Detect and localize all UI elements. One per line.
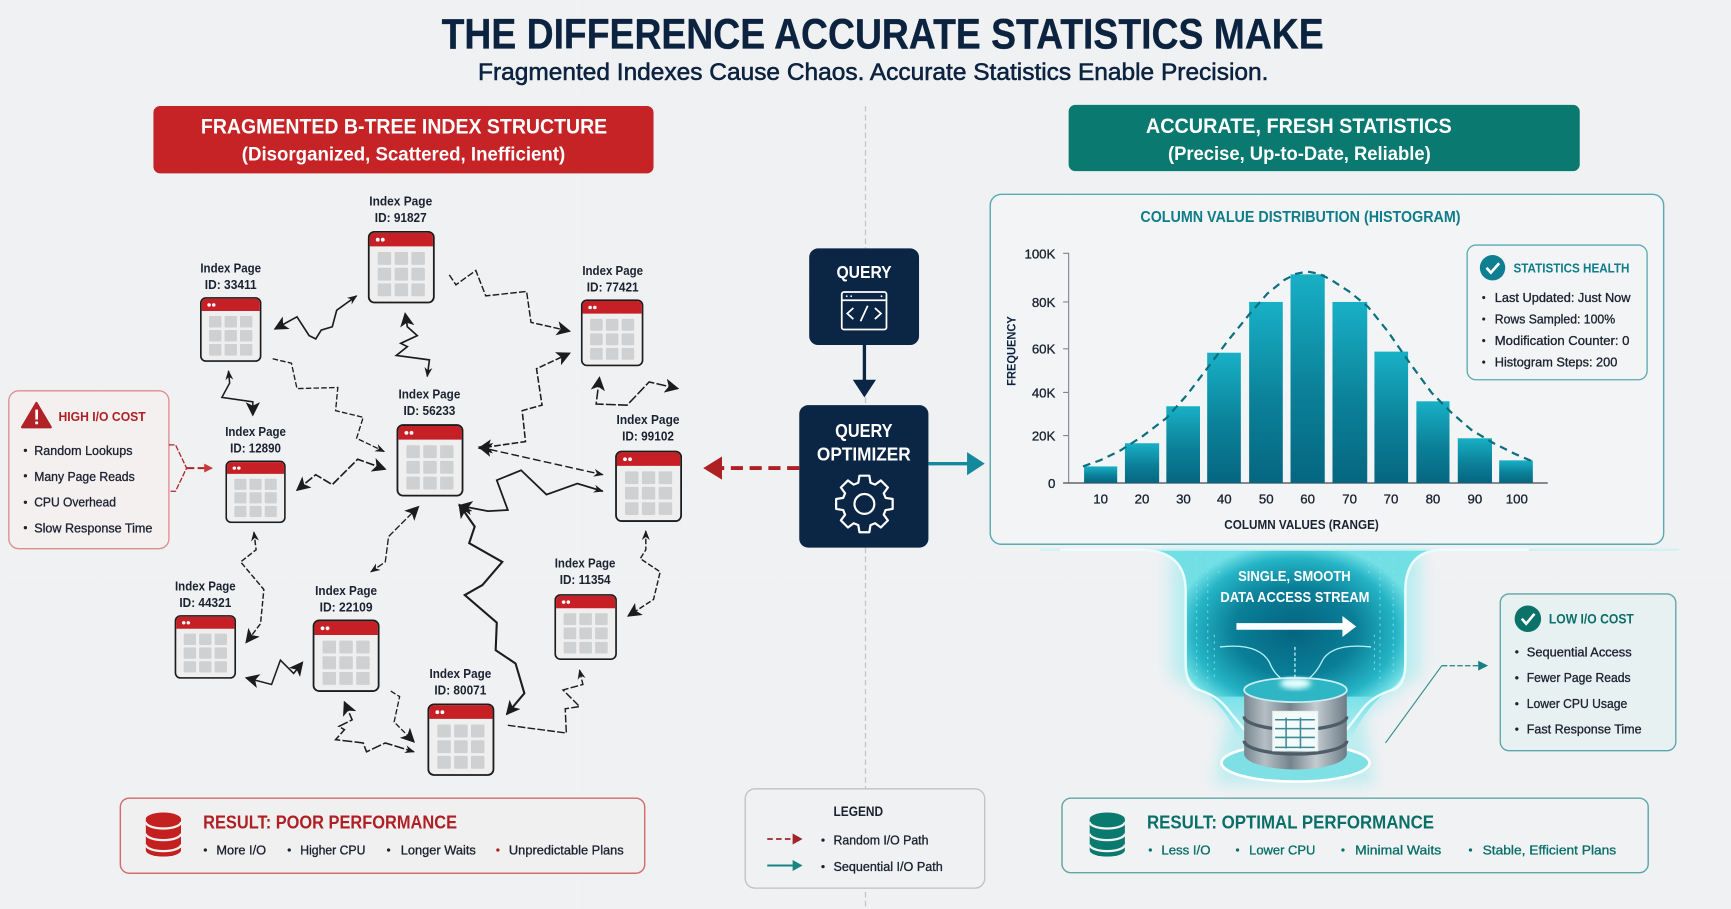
data access stream funnel: SINGLE, SMOOTH (1238, 569, 1351, 585)
x axis labels: 60 (1300, 491, 1315, 506)
callout: statistics health: Rows Sampled: 100% (1495, 311, 1615, 326)
legend (745, 789, 985, 888)
arrow: 12890 to 44321 (241, 532, 264, 643)
top glow line (1040, 549, 1679, 551)
result: optimal performance (1062, 798, 1648, 873)
result: poor performance (120, 798, 645, 873)
panel: histogram: COLUMN VALUE DISTRIBUTION (HISTOGRAM) (1140, 209, 1461, 226)
stream particles (1197, 557, 1393, 684)
y axis: 20K (1032, 428, 1056, 443)
x axis labels: 10 (1093, 491, 1108, 506)
index page 56233: Index Page (399, 387, 460, 402)
soft glow (1170, 552, 1421, 784)
y axis: 0 (1048, 476, 1055, 491)
subtitle: Fragmented Indexes Cause Chaos. Accurate Statistics Enable Precision. (478, 60, 1268, 86)
query box (809, 248, 919, 345)
index page 91827: ID: 91827 (375, 210, 427, 225)
y axis: 60K (1032, 341, 1056, 356)
index page 80071: Index Page (429, 666, 491, 681)
index page 77421: ID: 77421 (587, 279, 639, 294)
result: poor performance: Longer Waits (401, 842, 476, 857)
bar chart (1084, 274, 1533, 483)
callout: low I/O cost: Fewer Page Reads (1527, 670, 1631, 685)
index page 77421: Index Page (582, 263, 643, 278)
arrow: optimizer to fragmented index (703, 456, 799, 480)
arrow: 22109 to 80071 upper (391, 691, 414, 742)
index page 77421 (582, 263, 643, 365)
x axis labels: 50 (1259, 491, 1274, 506)
icon: code window (842, 292, 886, 330)
index page 99102 (616, 412, 681, 521)
y axis: 80K (1032, 295, 1056, 310)
data access stream funnel: DATA ACCESS STREAM (1220, 590, 1369, 606)
arrow: 56233 to 80071 (459, 505, 524, 714)
icon: warning triangle (22, 403, 51, 427)
index page 80071: ID: 80071 (434, 682, 486, 697)
callout: high I/O cost: CPU Overhead (34, 495, 116, 510)
callout: low I/O cost (1500, 594, 1676, 751)
result: optimal performance: Minimal Waits (1355, 842, 1442, 857)
index page 11354: ID: 11354 (560, 572, 611, 587)
index page 22109: Index Page (315, 583, 377, 598)
banner: fragmented b-tree: (Disorganized, Scattered, Inefficient) (242, 145, 565, 166)
arrow: 33411 to 12890 (222, 371, 253, 415)
legend: random path (767, 833, 928, 848)
platform (1222, 744, 1369, 782)
callout: statistics health: Modification Counter: 0 (1495, 333, 1629, 348)
banner: accurate statistics: (Precise, Up-to-Date, Reliable) (1168, 144, 1431, 165)
callout: high I/O cost: Slow Response Time (34, 521, 152, 536)
callout: low I/O cost: Sequential Access (1527, 644, 1632, 659)
index page 22109: ID: 22109 (320, 600, 373, 615)
index page 56233 (397, 387, 463, 496)
x axis title: COLUMN VALUES (RANGE) (1224, 517, 1379, 532)
callout: low I/O cost: LOW I/O COST (1549, 612, 1634, 627)
index page 91827: Index Page (369, 193, 432, 208)
result: poor performance: Unpredictable Plans (509, 842, 624, 857)
index page 12890: Index Page (225, 424, 286, 439)
arrow: 91827 to 56233 (396, 314, 429, 376)
callout: low I/O cost: Lower CPU Usage (1527, 696, 1627, 711)
arrow: query to optimizer (853, 344, 876, 397)
x axis labels: 90 (1468, 491, 1482, 506)
callout: statistics health (1467, 245, 1647, 380)
index page 33411: Index Page (200, 261, 261, 276)
arrow: 99102 to 11354 (628, 531, 660, 616)
index page 11354: Index Page (555, 555, 615, 570)
banner: fragmented b-tree (153, 106, 654, 173)
icon: database red (146, 813, 181, 857)
x axis labels: 20 (1135, 491, 1149, 506)
icon: check (1480, 255, 1505, 280)
legend: sequential path (767, 859, 943, 874)
index page 56233: ID: 56233 (403, 403, 455, 418)
x axis labels: 80 (1426, 491, 1440, 506)
arrow: 99102 to 56233 (479, 447, 603, 475)
arrow: 33411 to 56233 (273, 359, 384, 452)
arrow: optimizer to statistics (928, 452, 985, 475)
index page 80071 (428, 666, 493, 775)
x axis labels: 70 (1384, 491, 1398, 506)
query box: QUERY (836, 262, 892, 282)
legend: random path: Random I/O Path (833, 833, 928, 848)
x axis labels: 40 (1217, 491, 1232, 506)
arrow: 99102 to 77421 (596, 378, 678, 405)
result: poor performance: More I/O (216, 842, 266, 857)
result: optimal performance: Stable, Efficient Plans (1483, 842, 1617, 857)
y axis: 40K (1032, 385, 1056, 400)
legend: LEGEND (833, 804, 883, 819)
callout: high I/O cost: Many Page Reads (34, 469, 135, 484)
stream outline (1060, 550, 1529, 731)
index page 44321: Index Page (175, 579, 236, 594)
index page 99102: ID: 99102 (622, 428, 674, 443)
x axis labels: 70 (1342, 491, 1357, 506)
stream body (1141, 550, 1446, 697)
banner: accurate statistics (1069, 105, 1580, 171)
x axis labels: 100 (1506, 491, 1528, 506)
callout: statistics health: Histogram Steps: 200 (1495, 355, 1617, 370)
callout: high I/O cost: HIGH I/O COST (59, 409, 146, 424)
index page 44321: ID: 44321 (179, 595, 231, 610)
panel: histogram (990, 194, 1664, 544)
result: optimal performance: RESULT: OPTIMAL PERFORMANCE (1147, 813, 1434, 833)
arrow: high I/O connector (169, 445, 213, 491)
arrow: stream direction (1236, 616, 1356, 637)
arrow: 91827 to 77421 (449, 270, 570, 331)
index page 91827 (369, 193, 434, 302)
callout: high I/O cost (9, 391, 169, 549)
x axis labels: 30 (1176, 491, 1191, 506)
callout: low I/O cost: Fast Response Time (1527, 722, 1642, 737)
banner: accurate statistics: ACCURATE, FRESH STATISTICS (1146, 114, 1452, 138)
arrow: 44321 to 22109 (246, 660, 302, 684)
y axis: 100K (1024, 246, 1056, 261)
diagram: fragmented index pages (175, 193, 681, 775)
query optimizer box: QUERY (835, 421, 893, 441)
arrow: database to low I/O (1385, 661, 1488, 743)
query optimizer box (799, 405, 928, 548)
query optimizer box: OPTIMIZER (817, 444, 911, 464)
data access stream funnel (1040, 550, 1679, 784)
index page 44321 (175, 579, 236, 678)
result: poor performance: RESULT: POOR PERFORMANCE (203, 813, 457, 833)
index page 22109 (314, 583, 379, 691)
distribution curve (1083, 272, 1535, 466)
icon: database teal (1090, 813, 1125, 857)
result: optimal performance: Less I/O (1161, 842, 1210, 857)
callout: statistics health: STATISTICS HEALTH (1514, 261, 1629, 276)
flowing lines into database (1220, 646, 1371, 684)
database cylinder (1244, 678, 1347, 769)
icon: table (1273, 712, 1318, 751)
legend: sequential path: Sequential I/O Path (833, 859, 943, 874)
arrow: 22109 to 56233 (371, 507, 418, 572)
callout: high I/O cost: Random Lookups (34, 443, 133, 458)
y axis (1024, 246, 1548, 491)
callout: statistics health: Last Updated: Just Now (1495, 290, 1631, 305)
index page 12890 (225, 424, 286, 522)
x axis labels (1093, 491, 1528, 506)
arrow: 56233 to 99102 (459, 470, 603, 511)
index page 99102: Index Page (617, 412, 679, 427)
arrow: 22109 to 80071 lower (336, 702, 414, 752)
icon: check (1515, 606, 1541, 632)
title: THE DIFFERENCE ACCURATE STATISTICS MAKE (442, 11, 1324, 59)
lower flare (1199, 687, 1392, 764)
index page 33411 (200, 261, 261, 361)
arrow: 80071 to 11354 (508, 670, 583, 733)
banner: fragmented b-tree: FRAGMENTED B-TREE INDEX STRUCTURE (201, 115, 607, 139)
y axis title: FREQUENCY (1007, 316, 1019, 386)
index page 11354 (555, 555, 616, 659)
result: optimal performance: Lower CPU (1249, 842, 1315, 857)
arrow: 56233 to 77421 (479, 353, 570, 448)
icon: gear (836, 476, 893, 532)
arrow: 12890 to 56233 (297, 459, 385, 490)
result: poor performance: Higher CPU (300, 842, 365, 857)
index page 33411: ID: 33411 (205, 277, 257, 292)
arrow: 33411 to 91827 (275, 296, 357, 339)
index page 12890: ID: 12890 (230, 441, 281, 456)
